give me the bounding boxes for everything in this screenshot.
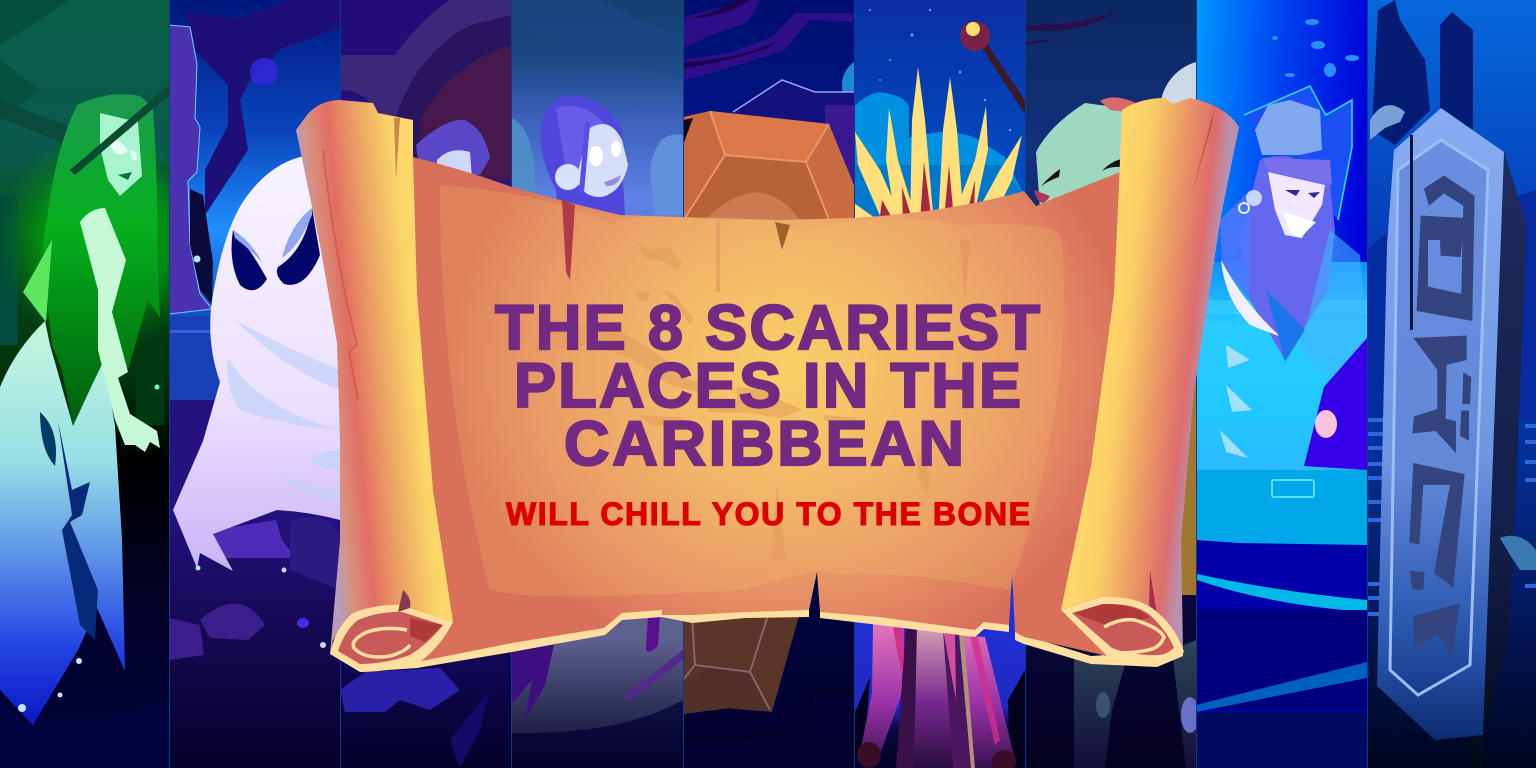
panel 2: white ghost with angry eyes xyxy=(169,0,340,768)
water stairs xyxy=(1367,418,1536,616)
falling debris xyxy=(1272,19,1359,77)
monolith front xyxy=(1377,108,1504,740)
dark tree arch xyxy=(185,0,340,215)
title: PLACES IN THE xyxy=(514,351,1021,421)
ghost body xyxy=(173,150,340,571)
panel 4: ghost girl xyxy=(511,0,683,768)
sky stars xyxy=(869,9,1011,131)
panel 7: green zombie with moon xyxy=(1026,0,1196,768)
left scroll curl xyxy=(330,590,453,672)
sunken ruins xyxy=(1372,0,1473,145)
ghost hair xyxy=(44,94,160,426)
fish bottom xyxy=(1500,536,1536,570)
subtitle: WILL CHILL YOU TO THE BONE xyxy=(506,496,1030,532)
fish top xyxy=(1370,105,1405,140)
pirate beard and coat xyxy=(1240,156,1335,360)
ghost girl dress xyxy=(511,610,683,733)
title: THE 8 SCARIEST xyxy=(495,293,1040,363)
panel 1: green long-haired ghost woman xyxy=(0,0,169,768)
floating lights xyxy=(194,256,326,648)
coat buttons xyxy=(1220,345,1252,458)
haunted house roof xyxy=(733,81,854,124)
black rope xyxy=(1410,135,1413,330)
panel 6: witch doctor with spiked headdress xyxy=(854,0,1030,768)
right scroll curl xyxy=(1061,597,1184,664)
twisted tree branches xyxy=(683,0,853,80)
pink robes xyxy=(857,623,1016,768)
parchment scroll xyxy=(296,98,1239,672)
peeking woman head xyxy=(416,120,490,175)
purple cloak hem xyxy=(340,668,460,712)
ghost girl head xyxy=(541,95,625,215)
gravestone steps xyxy=(214,520,296,558)
ghost face xyxy=(100,113,142,196)
title: CARIBBEAN xyxy=(564,409,964,479)
monolith inset xyxy=(1390,140,1488,695)
belt buckle xyxy=(1272,480,1314,497)
scroll bottom cream edge xyxy=(360,608,1183,672)
gargoyle statue xyxy=(169,25,212,314)
zombie head xyxy=(1036,103,1125,210)
parchment tears xyxy=(562,200,970,560)
panel 8: blue pirate ghost xyxy=(1196,0,1367,768)
shoulder and arm xyxy=(80,208,160,452)
zombie legs xyxy=(1074,657,1127,768)
glowing spirit lights xyxy=(18,384,160,712)
monolith dark side xyxy=(1470,152,1527,768)
left scroll roll xyxy=(296,100,453,654)
grass tufts xyxy=(854,677,870,768)
panel 9: carved blue monolith xyxy=(1367,0,1536,768)
coffin lid top xyxy=(683,111,854,225)
dress tears xyxy=(40,412,98,640)
staff with orb xyxy=(960,21,1025,114)
faint Caribbean map xyxy=(527,242,975,575)
treasure glove xyxy=(1304,338,1367,470)
carved glyphs xyxy=(1409,175,1475,656)
coffin foot xyxy=(683,612,800,714)
panel 3: arch with peeking woman xyxy=(340,0,511,768)
pirate hat outline xyxy=(1244,86,1352,220)
title xyxy=(495,293,1040,479)
panel 5: wooden coffin and house xyxy=(684,0,854,742)
ghost folds xyxy=(228,320,340,500)
ghost eyes xyxy=(232,208,320,290)
panel seams xyxy=(169,0,1368,768)
inner lighter sheet xyxy=(440,185,1064,597)
scroll body xyxy=(400,157,1130,662)
shirt collar xyxy=(1221,260,1281,337)
zombie torso edge xyxy=(1196,379,1197,380)
ghost dress xyxy=(0,321,125,725)
spiked headdress xyxy=(854,67,1022,225)
right scroll roll xyxy=(1061,98,1239,650)
